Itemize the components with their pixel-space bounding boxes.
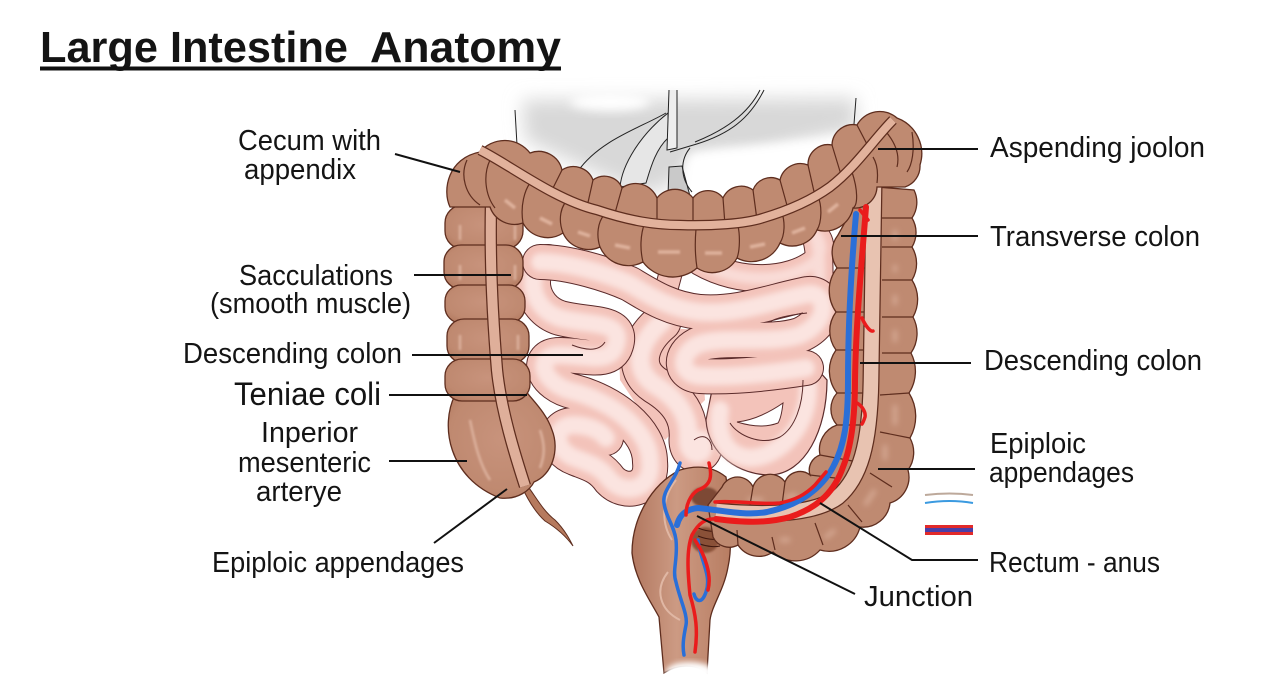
red rectal and side branches bbox=[686, 210, 873, 652]
title: Anatomy bbox=[370, 23, 562, 72]
transverse haustra separators bbox=[464, 125, 913, 268]
ascending colon with cecum bbox=[444, 205, 573, 546]
transverse haustra highlights bbox=[505, 200, 838, 253]
labels: right bbox=[864, 132, 1205, 613]
label: sacculations: (smooth muscle) bbox=[210, 288, 411, 320]
descending colon body bbox=[708, 186, 918, 561]
tube: left loop bbox=[533, 262, 650, 489]
labels: left bbox=[183, 125, 464, 579]
tube: long upper loop bbox=[540, 262, 823, 376]
rectum and anal canal bbox=[632, 467, 731, 682]
label: inperior mesenteric arterye: arterye bbox=[256, 476, 342, 508]
ascending haustra bbox=[444, 205, 530, 401]
label: epiploic appendages right: Epiploic bbox=[990, 428, 1086, 460]
title: Large Intestine bbox=[40, 23, 348, 72]
red artery main trunk bbox=[716, 207, 866, 522]
legend swatches bbox=[925, 494, 973, 535]
transverse body with scalloped edges bbox=[447, 111, 922, 277]
title bbox=[40, 23, 562, 72]
label: sacculations: Sacculations bbox=[239, 260, 393, 292]
label: sacculations bbox=[210, 260, 411, 320]
intestine backing between loops bbox=[618, 325, 705, 440]
label: cecum with appendix: Cecum with bbox=[238, 125, 381, 157]
tube: upper right behind colon bbox=[664, 235, 820, 298]
diagram: large intestine anatomy bbox=[389, 90, 978, 682]
descending colon bbox=[708, 185, 918, 561]
transverse colon bbox=[447, 111, 922, 277]
upper organs background bbox=[515, 90, 856, 205]
label: cecum with appendix: appendix bbox=[244, 154, 356, 186]
label: descending colon right: Descending colon bbox=[984, 345, 1202, 377]
descending colon haustra separators bbox=[737, 218, 913, 550]
leader lines bbox=[389, 149, 978, 594]
appendix bbox=[522, 484, 573, 546]
label: inperior mesenteric arterye: Inperior bbox=[261, 417, 358, 449]
descending colon highlights bbox=[748, 230, 895, 540]
label: cecum with appendix bbox=[238, 125, 381, 186]
small intestine fold lines bbox=[572, 313, 807, 450]
cecum pouch bbox=[448, 390, 555, 498]
label: inperior mesenteric arterye: mesenteric bbox=[238, 447, 371, 479]
label: epiploic appendages left: Epiploic appendages bbox=[212, 547, 464, 579]
ascending tenia band bbox=[491, 205, 525, 486]
transverse tenia band bbox=[480, 120, 893, 225]
label: inperior mesenteric arterye bbox=[238, 417, 371, 508]
label: aspending joolon: Aspending joolon bbox=[990, 132, 1205, 164]
label: descending colon left: Descending colon bbox=[183, 338, 402, 370]
label: epiploic appendages right bbox=[989, 428, 1134, 489]
colon tenia band bbox=[716, 185, 874, 513]
label: transverse colon: Transverse colon bbox=[990, 221, 1200, 253]
label: epiploic appendages right: appendages bbox=[989, 457, 1134, 489]
blue rectal branches bbox=[664, 463, 708, 655]
label: rectum anus: Rectum - anus bbox=[989, 547, 1160, 579]
small intestine bbox=[533, 235, 827, 489]
lower right loop blob bbox=[706, 350, 827, 475]
blood vessels bbox=[664, 207, 873, 655]
label: teniae coli: Teniae coli bbox=[234, 376, 381, 412]
label: junction: Junction bbox=[864, 581, 973, 613]
blue vein main trunk bbox=[677, 214, 856, 525]
tube: central loop bbox=[640, 322, 703, 454]
